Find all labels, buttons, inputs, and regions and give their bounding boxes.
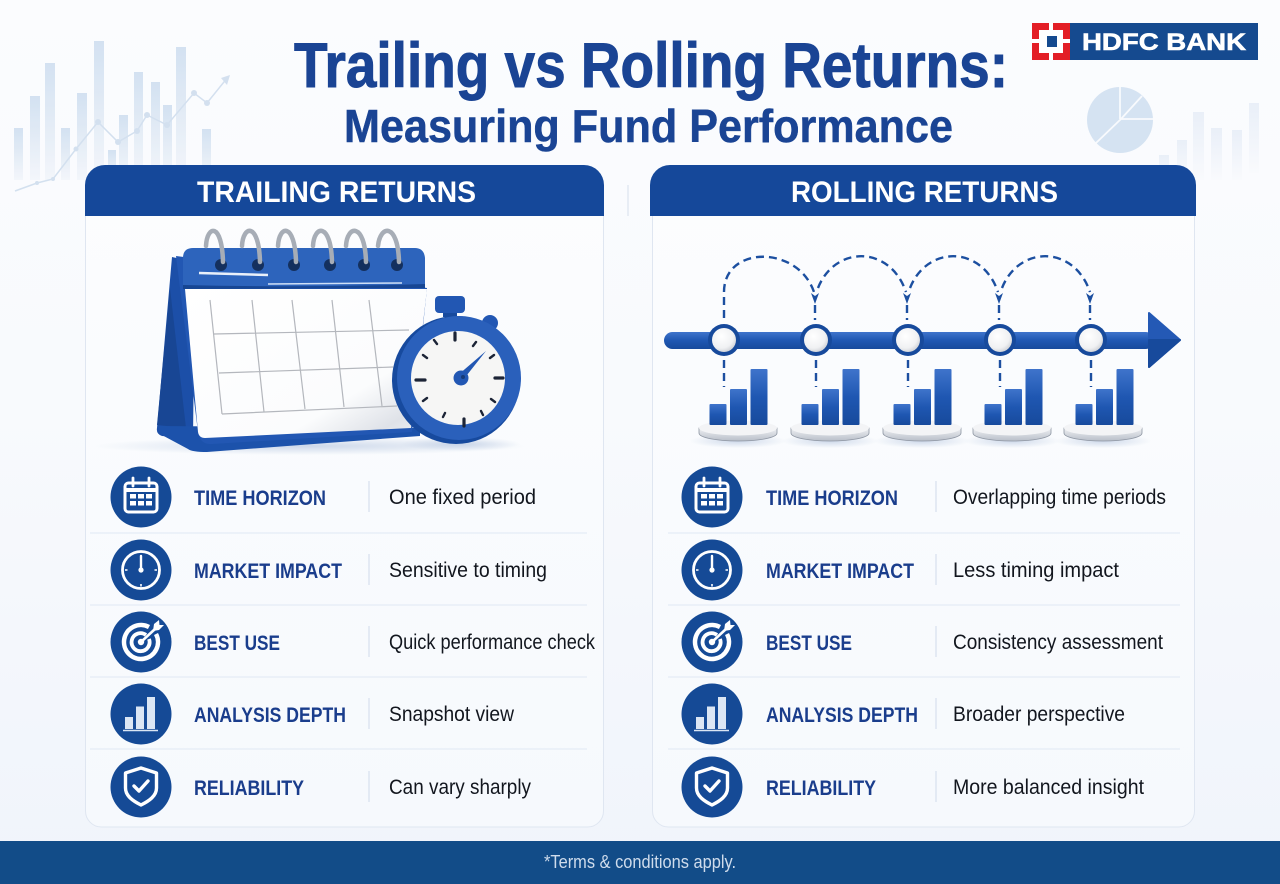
panel header left: [85, 165, 604, 216]
panel body right: [652, 180, 1194, 827]
panel header right: ROLLING RETURNS: [791, 176, 1058, 209]
title: Trailing vs Rolling Returns:: [294, 31, 1008, 101]
row: market impact: Less timing impact: [953, 559, 1119, 582]
decorative pie chart: [1087, 87, 1153, 173]
row: time horizon: [110, 466, 536, 528]
row: market impact: MARKET IMPACT: [194, 560, 342, 583]
row: reliability: [110, 756, 531, 818]
decorative bar and line chart: [14, 41, 230, 191]
row: market impact: MARKET IMPACT: [766, 560, 914, 583]
row: analysis depth: Broader perspective: [953, 703, 1125, 726]
footer bar: *Terms & conditions apply.: [544, 852, 736, 872]
row: analysis depth: [110, 684, 515, 744]
row: time horizon: One fixed period: [389, 486, 536, 509]
row: reliability: RELIABILITY: [766, 777, 876, 800]
panel: trailing returns: [85, 165, 604, 827]
timeline arrow: [664, 313, 1180, 367]
row: best use: BEST USE: [194, 632, 280, 655]
panel body left: [86, 180, 604, 827]
illustration: rolling timeline: [664, 256, 1180, 448]
footer bar: [0, 841, 1280, 884]
row: reliability: Can vary sharply: [389, 776, 531, 799]
faint centre divider: [627, 185, 629, 216]
illustration: stopwatch: [392, 296, 521, 451]
panel header right: [650, 165, 1196, 216]
panel: rolling returns: [650, 165, 1196, 827]
row: best use: BEST USE: [766, 632, 852, 655]
HDFC Bank logo: [1032, 23, 1258, 60]
comparison rows: rolling returns: [668, 466, 1180, 818]
row: best use: [682, 612, 1163, 672]
row: market impact: [682, 540, 1119, 600]
row: reliability: RELIABILITY: [194, 777, 304, 800]
row: analysis depth: [682, 684, 1125, 744]
row: best use: Quick performance check: [389, 631, 595, 654]
row: time horizon: [682, 466, 1166, 528]
title: [294, 31, 1008, 152]
row: time horizon: TIME HORIZON: [194, 487, 326, 510]
row: reliability: [682, 756, 1144, 818]
illustration: calendar: [95, 231, 525, 455]
timeline nodes: [708, 324, 1107, 356]
decorative faded bars right: [1159, 103, 1259, 180]
subtitle: Measuring Fund Performance: [344, 100, 953, 152]
row: analysis depth: Snapshot view: [389, 703, 515, 726]
row: time horizon: Overlapping time periods: [953, 486, 1166, 509]
comparison rows: trailing returns: [90, 466, 595, 818]
row: reliability: More balanced insight: [953, 776, 1144, 799]
row: analysis depth: ANALYSIS DEPTH: [194, 704, 346, 727]
row: analysis depth: ANALYSIS DEPTH: [766, 704, 918, 727]
HDFC Bank logo: HDFC BANK: [1082, 29, 1247, 56]
row: best use: [110, 612, 595, 672]
row: time horizon: TIME HORIZON: [766, 487, 898, 510]
row: best use: Consistency assessment: [953, 631, 1163, 654]
bar groups on platforms: [690, 369, 1151, 448]
row: market impact: Sensitive to timing: [389, 559, 547, 582]
dashed arcs: [724, 256, 1091, 387]
row: market impact: [110, 540, 547, 600]
panel header left: TRAILING RETURNS: [197, 176, 476, 209]
